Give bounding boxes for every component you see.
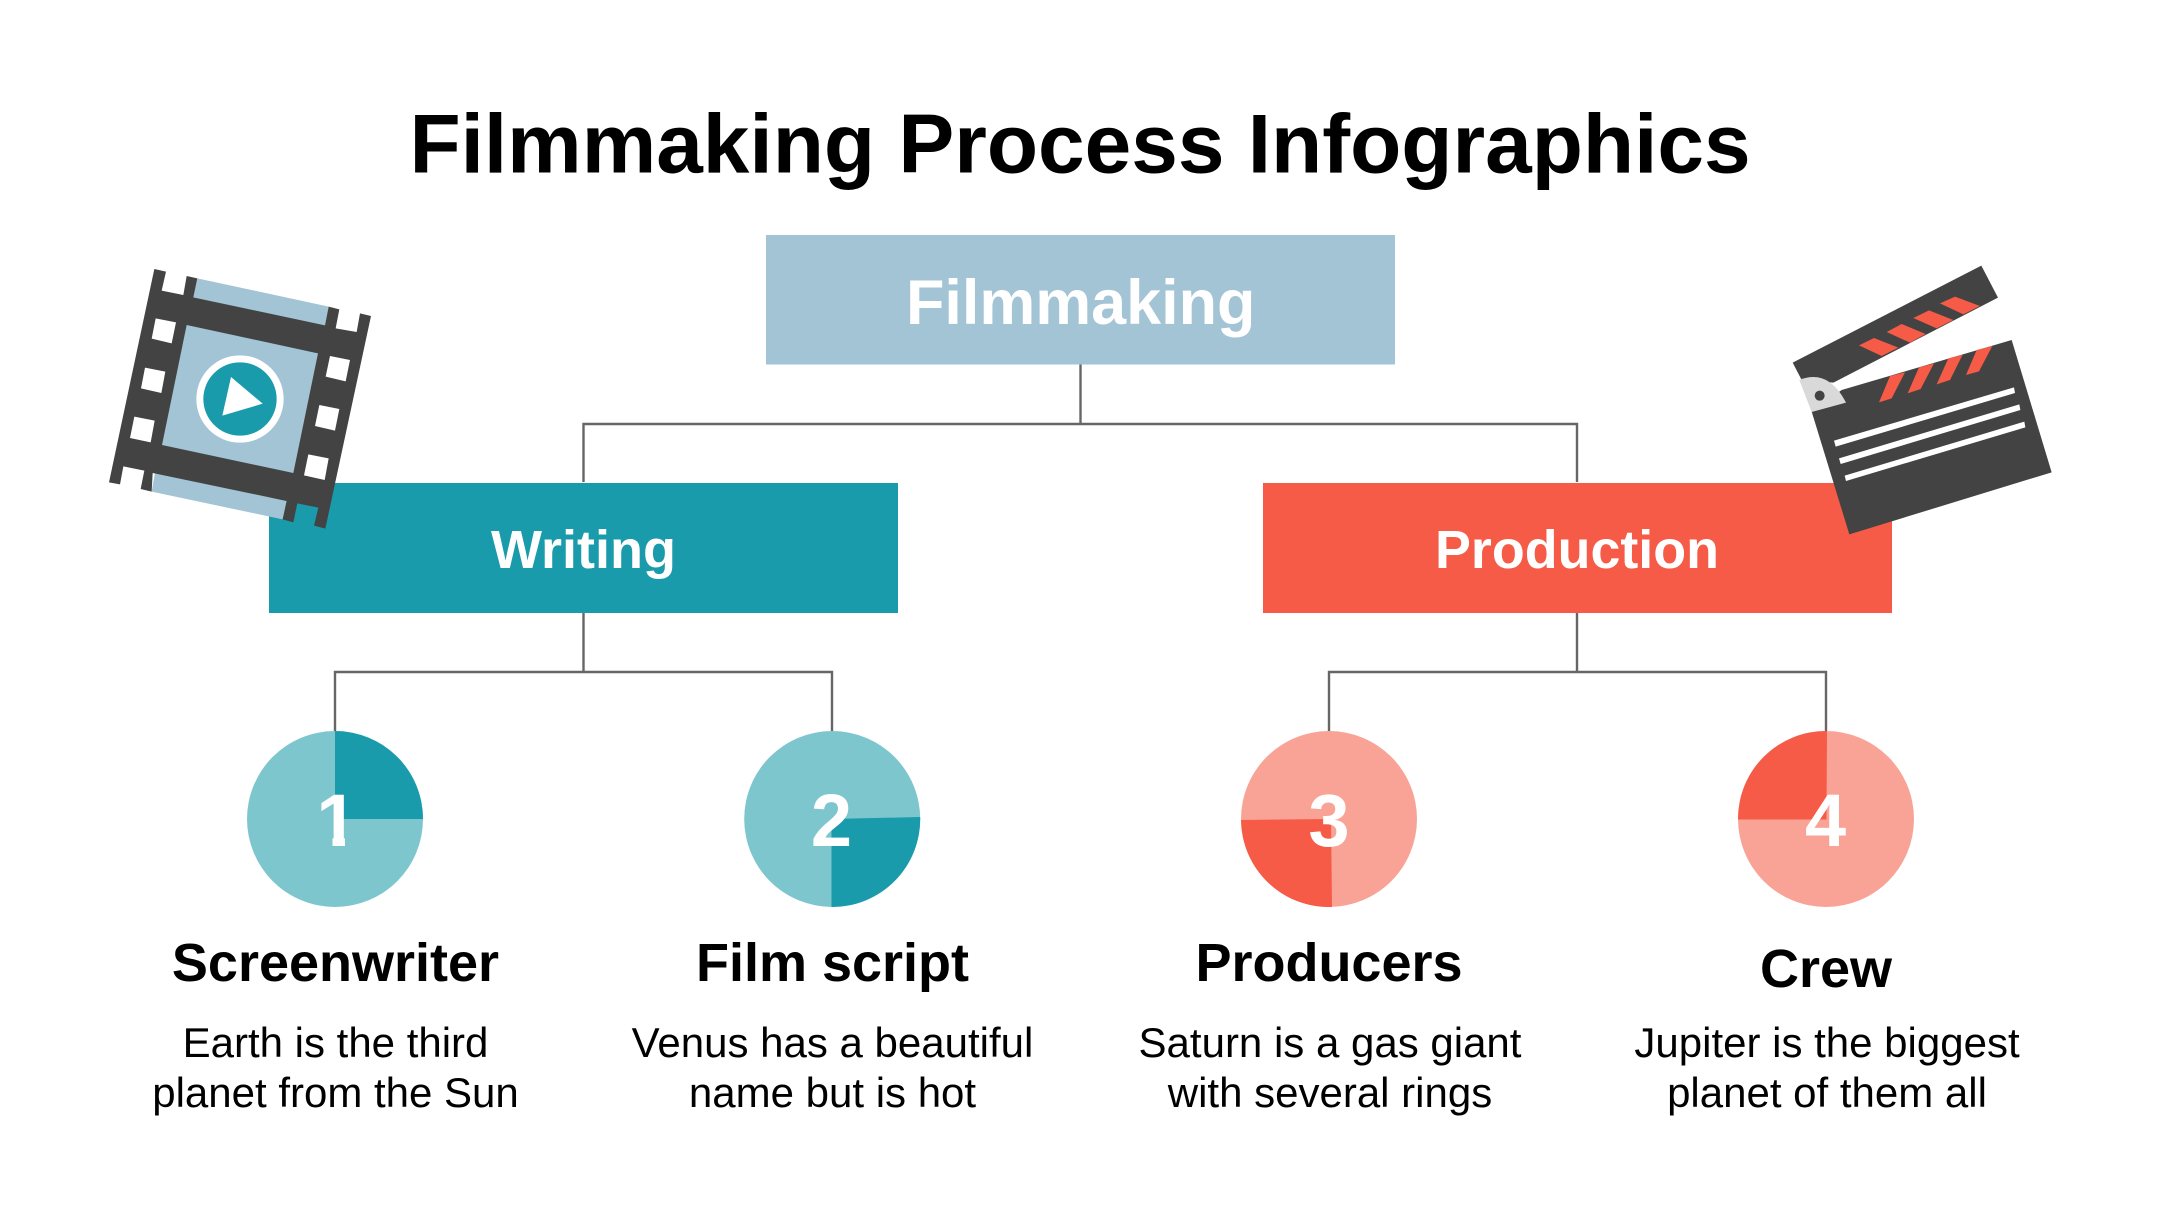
heading: Screenwriter: Screenwriter: [172, 933, 499, 993]
description 1: planet from the Sun: [152, 1069, 519, 1116]
description 4: planet of them all: [1667, 1069, 1987, 1116]
description 2: Venus has a beautiful: [632, 1019, 1033, 1066]
step 2: Film script: [632, 731, 1033, 1116]
heading: Film script: Film script: [696, 933, 969, 993]
pie 4: [1738, 731, 1914, 907]
heading: Producers: Producers: [1195, 933, 1463, 993]
box: Writing: Writing: [491, 520, 676, 580]
description 3: with several rings: [1167, 1069, 1492, 1116]
box: Filmmaking: Filmmaking: [906, 268, 1255, 338]
connector lines: [335, 364, 1826, 731]
box: Production: [1263, 483, 1892, 613]
number 4: 4: [1805, 779, 1846, 862]
description 3: Saturn is a gas giant: [1139, 1019, 1522, 1066]
step 3: Producers: [1139, 731, 1522, 1116]
pie 2: [744, 731, 920, 907]
box: Production: Production: [1435, 520, 1719, 580]
title: Filmmaking Process Infographics: [409, 96, 1751, 190]
icon: film strip: [109, 269, 371, 529]
box: Filmmaking: [766, 235, 1395, 364]
number 3: 3: [1308, 779, 1350, 862]
heading: Crew: Crew: [1760, 939, 1893, 999]
description 2: name but is hot: [689, 1069, 976, 1116]
number 2: 2: [811, 779, 852, 862]
pie 1: [247, 731, 423, 907]
pie 3: [1241, 731, 1417, 907]
step 1: Screenwriter: [152, 731, 519, 1116]
description 1: Earth is the third: [183, 1019, 488, 1066]
box: Writing: [269, 483, 898, 613]
step 4: Crew: [1634, 731, 2020, 1116]
number 1: 1: [316, 779, 358, 862]
description 4: Jupiter is the biggest: [1634, 1019, 2020, 1066]
icon: clapperboard: [1793, 266, 2052, 534]
